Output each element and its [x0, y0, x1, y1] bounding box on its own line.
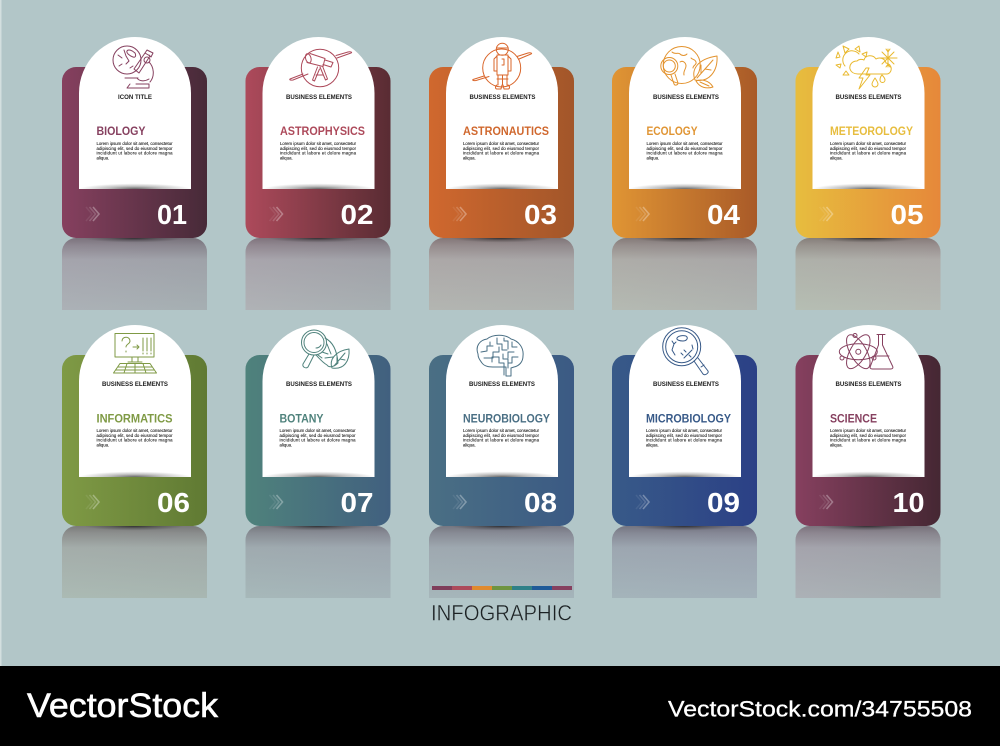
icon: chevrons: [820, 495, 832, 509]
text block: incididunt ut labore et dolore magna: [280, 151, 357, 156]
number: 08: [524, 487, 557, 518]
text block: aliqua.: [463, 155, 476, 160]
number: 01: [157, 199, 187, 230]
title: INFOGRAPHIC: [431, 600, 572, 626]
icon: chevrons: [86, 495, 99, 509]
label: BUSINESS ELEMENTS: [653, 381, 719, 388]
text block: aliqua.: [830, 155, 843, 160]
label: BUSINESS ELEMENTS: [470, 94, 536, 101]
text block: incididunt ut labore et dolore magna: [96, 151, 173, 156]
text block: Lorem ipsum dolor sit amet, consectetur: [830, 141, 907, 146]
text block: incididunt ut labore et dolore magna: [830, 151, 907, 156]
text block: Lorem ipsum dolor sit amet, consectetur: [830, 428, 907, 433]
icon: microscope: [113, 46, 153, 88]
brand name: VectorStock: [27, 687, 219, 725]
text block: incididunt ut labore et dolore magna: [463, 151, 540, 156]
text block: incididunt ut labore et dolore magna: [463, 438, 540, 443]
card 03: astronautics: [429, 37, 574, 310]
text block: adipiscing elit, sed do eiusmod tempor: [96, 146, 173, 151]
text block: adipiscing elit, sed do eiusmod tempor: [280, 146, 357, 151]
icon: astronaut: [473, 43, 532, 89]
icon: ecology globe: [661, 46, 717, 88]
icon: magnifier and leaf: [302, 330, 349, 368]
heading: BIOLOGY: [96, 125, 146, 138]
label: ICON TITLE: [118, 94, 152, 101]
text block: aliqua.: [646, 442, 659, 447]
card 04: ecology: [612, 37, 757, 310]
text block: [646, 428, 723, 447]
heading: MICROBIOLOGY: [646, 412, 731, 426]
icon: chevrons: [270, 495, 282, 509]
footer bar: [0, 666, 1000, 746]
text block: adipiscing elit, sed do eiusmod tempor: [830, 146, 907, 151]
number: 09: [707, 487, 740, 518]
number: 10: [892, 487, 924, 518]
heading: ASTRONAUTICS: [463, 125, 549, 138]
text block: adipiscing elit, sed do eiusmod tempor: [830, 433, 907, 438]
icon: brain: [477, 335, 523, 376]
label: BUSINESS ELEMENTS: [836, 381, 902, 388]
text block: adipiscing elit, sed do eiusmod tempor: [646, 146, 723, 151]
text block: [463, 428, 540, 447]
heading: ECOLOGY: [646, 125, 698, 138]
text block: Lorem ipsum dolor sit amet, consectetur: [96, 141, 173, 146]
text block: aliqua.: [463, 442, 476, 447]
text block: aliqua.: [280, 442, 292, 447]
card 09: microbiology: [612, 325, 757, 598]
text block: Lorem ipsum dolor sit amet, consectetur: [646, 428, 723, 433]
colour bar: [432, 586, 572, 590]
heading: METEOROLOGY: [830, 125, 913, 138]
number: 06: [157, 487, 190, 518]
label: BUSINESS ELEMENTS: [286, 94, 352, 101]
text block: adipiscing elit, sed do eiusmod tempor: [280, 433, 356, 438]
text block: incididunt ut labore et dolore magna: [830, 438, 907, 443]
text block: incididunt ut labore et dolore magna: [96, 438, 173, 443]
heading: ASTROPHYSICS: [280, 125, 365, 138]
text block: [646, 141, 723, 160]
label: BUSINESS ELEMENTS: [836, 94, 902, 101]
card 06: informatics: [62, 325, 207, 598]
text block: Lorem ipsum dolor sit amet, consectetur: [280, 428, 356, 433]
card 10: science: [796, 325, 940, 598]
label: BUSINESS ELEMENTS: [102, 381, 168, 388]
icon: chevrons: [86, 207, 99, 221]
text block: [830, 428, 907, 447]
text block: Lorem ipsum dolor sit amet, consectetur: [463, 141, 540, 146]
text block: aliqua.: [280, 155, 293, 160]
icon: atom and flask: [839, 331, 893, 372]
text block: Lorem ipsum dolor sit amet, consectetur: [463, 428, 540, 433]
text block: [96, 141, 173, 160]
icon: weather: [836, 46, 897, 89]
heading: SCIENCE: [830, 412, 877, 426]
label: BUSINESS ELEMENTS: [653, 94, 719, 101]
icon: chevrons: [636, 495, 649, 509]
url: VectorStock.com/34755508: [668, 696, 972, 722]
card 08: neurobiology: [429, 325, 574, 598]
label: BUSINESS ELEMENTS: [469, 381, 535, 388]
icon: chevrons: [636, 207, 649, 221]
icon: telescope: [290, 49, 352, 87]
text block: Lorem ipsum dolor sit amet, consectetur: [280, 141, 357, 146]
text block: incididunt ut labore et dolore magna: [646, 438, 723, 443]
card 02: astrophysics: [246, 37, 390, 310]
number: 05: [890, 199, 924, 230]
text block: adipiscing elit, sed do eiusmod tempor: [646, 433, 723, 438]
icon: chevrons: [453, 207, 466, 221]
text block: aliqua.: [646, 155, 659, 160]
text block: aliqua.: [830, 442, 843, 447]
icon: computer: [114, 334, 156, 373]
label: BUSINESS ELEMENTS: [286, 381, 352, 388]
card 05: meteorology: [796, 37, 940, 310]
text block: adipiscing elit, sed do eiusmod tempor: [96, 433, 173, 438]
icon: chevrons: [270, 207, 282, 221]
number: 03: [524, 199, 557, 230]
icon: microbe magnifier: [663, 328, 708, 375]
number: 02: [340, 199, 374, 230]
card 07: botany: [246, 325, 390, 598]
text block: adipiscing elit, sed do eiusmod tempor: [463, 146, 540, 151]
text block: [830, 141, 907, 160]
card 01: biology: [62, 37, 207, 310]
text block: incididunt ut labore et dolore magna: [280, 438, 356, 443]
text block: [96, 428, 173, 447]
text block: adipiscing elit, sed do eiusmod tempor: [463, 433, 540, 438]
text block: [463, 141, 540, 160]
text block: [280, 141, 357, 160]
text block: incididunt ut labore et dolore magna: [646, 151, 723, 156]
icon: chevrons: [453, 495, 466, 509]
number: 04: [707, 199, 741, 230]
text block: aliqua.: [96, 155, 109, 160]
heading: INFORMATICS: [96, 412, 173, 426]
text block: Lorem ipsum dolor sit amet, consectetur: [646, 141, 723, 146]
text block: [280, 428, 356, 447]
heading: BOTANY: [280, 412, 324, 426]
text block: aliqua.: [96, 442, 109, 447]
heading: NEUROBIOLOGY: [463, 412, 550, 426]
icon: chevrons: [820, 207, 832, 221]
text block: Lorem ipsum dolor sit amet, consectetur: [96, 428, 173, 433]
number: 07: [340, 487, 374, 518]
